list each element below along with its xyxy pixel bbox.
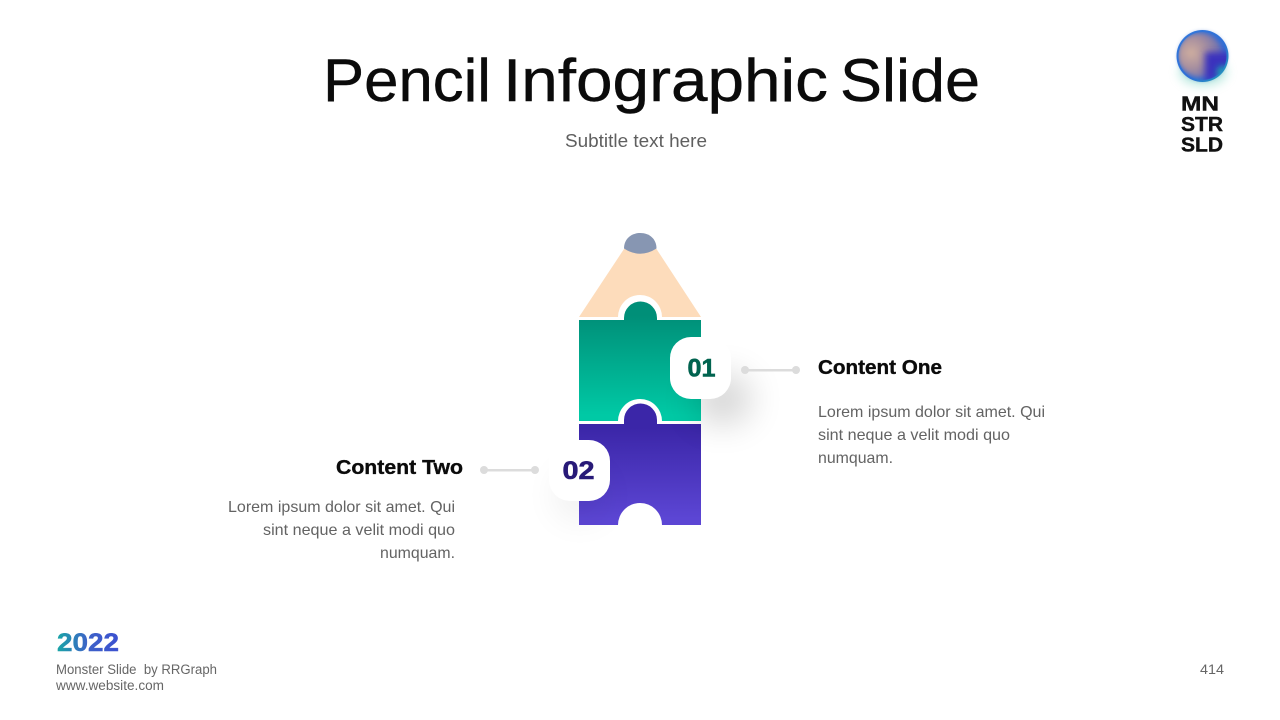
heading: content one: Content One (818, 357, 942, 379)
content one (818, 357, 1045, 467)
footer (55, 629, 217, 693)
logo text: STR (1181, 114, 1224, 136)
logo (1176, 30, 1232, 156)
badge 01 (670, 337, 750, 423)
year: 2022 (57, 629, 119, 657)
title: Pencil (323, 47, 491, 114)
pencil infographic (549, 233, 750, 525)
badge 02: 02 (562, 457, 594, 485)
body: content one (818, 404, 1045, 467)
title: Infographic (503, 47, 828, 114)
title (323, 47, 980, 114)
puzzle piece: purple (579, 404, 701, 525)
badge 02 (549, 440, 610, 520)
subtitle: Subtitle text here (565, 131, 707, 151)
body: content two: numquam. (380, 545, 455, 562)
footer website: www.website.com (55, 678, 164, 693)
pencil tip: graphite (624, 233, 656, 254)
body: content two (228, 499, 455, 562)
logo text: SLD (1181, 134, 1223, 156)
logo text (1181, 94, 1224, 156)
body: content two: sint neque a velit modi quo (263, 522, 455, 539)
body: content two: Lorem ipsum dolor sit amet. Qui (228, 499, 455, 516)
content two (228, 457, 463, 562)
page number: 414 (1200, 661, 1224, 677)
badge 01: 01 (688, 354, 716, 382)
body: content one: Lorem ipsum dolor sit amet. Qui (818, 404, 1045, 421)
heading: content two: Content Two (336, 457, 463, 479)
title: Slide (840, 47, 980, 114)
puzzle piece: green (579, 302, 701, 421)
icon: logo sphere (1176, 30, 1232, 86)
body: content one: numquam. (818, 450, 893, 467)
connector two (480, 466, 539, 474)
logo text: MN (1181, 94, 1219, 116)
pencil tip: wood (579, 249, 701, 317)
footer credit: Monster Slide by RRGraph (56, 662, 217, 677)
body: content one: sint neque a velit modi quo (818, 427, 1010, 444)
connector one (741, 366, 800, 374)
